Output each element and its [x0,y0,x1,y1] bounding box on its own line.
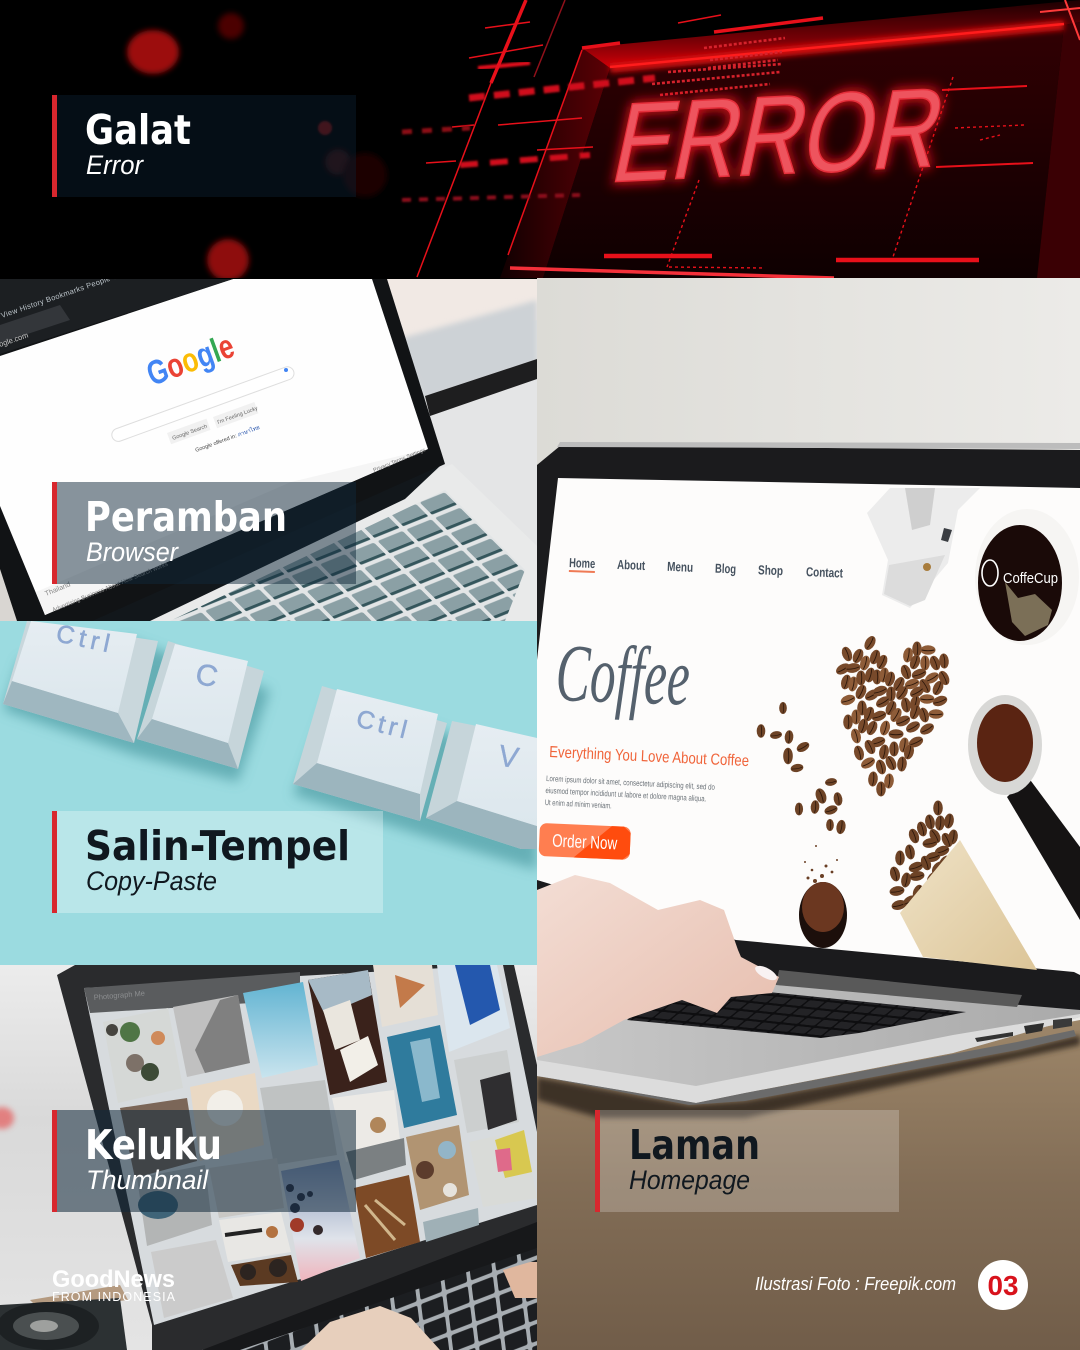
keycap c: C [193,658,221,694]
search box: Google Search [172,424,208,442]
label: peramban [52,482,356,584]
label: galat [52,95,356,197]
key shadows [3,640,537,870]
keycap v [426,721,537,849]
photo credit: Ilustrasi Foto : Freepik.com [755,1274,956,1294]
page number badge [978,1260,1028,1310]
portafilter [968,695,1080,920]
heading: laman: Laman [629,1121,760,1169]
laptop lid [537,446,1080,1015]
scattered beans [757,702,847,835]
translation: copy-paste: Copy-Paste [86,866,217,896]
site navigation: About [617,557,646,573]
paper bag of beans [888,800,1037,970]
data text noise [652,38,785,95]
keycap ctrl 1 [3,619,158,743]
coffee cup: CoffeCup [1003,570,1058,587]
panel: coffee homepage photo [537,278,1080,1350]
heading: keluku: Keluku [85,1121,222,1169]
site navigation: Contact [806,564,844,581]
label: keluku [52,1110,356,1212]
error text: ERROR [603,65,956,207]
lorem paragraph: eiusmod tempor incididunt ut labore et dolore magna aliqua. [545,786,707,803]
label: laman [595,1110,899,1212]
error text [604,78,951,194]
translation: thumbnail: Thumbnail [86,1165,209,1195]
laptop keyboard and hand [202,1222,537,1350]
search box: I'm Feeling Lucky [217,406,259,426]
translation: error: Error [86,150,144,180]
blurred data dashes [402,78,655,200]
hand [537,875,779,1057]
coffee cup [978,525,1062,641]
coffee heading: Coffee [554,627,691,723]
laptop keyboard [92,464,537,625]
lorem paragraph: Ut enim ad minim veniam. [545,798,612,810]
search box: Advertising Business About How Search works [52,562,169,614]
google logo: Google [142,327,239,394]
coffee beans heart [834,634,952,796]
laptop base [537,970,1080,1105]
camera [0,1285,128,1350]
panel: copy paste keys [0,619,537,965]
label: salin-tempel [52,811,383,913]
tile: plants [106,1008,168,1081]
homepage screen [537,478,1080,975]
panel: thumbnail photo [0,965,537,1350]
error screen [402,0,1080,278]
site navigation: Blog [715,561,736,576]
site navigation: Menu [667,559,693,575]
site navigation: Home [569,555,595,571]
heading: galat: Galat [85,106,191,154]
keycap ctrl 2: Ctrl [354,705,414,745]
translation: browser: Browser [86,537,179,567]
lorem paragraph: Lorem ipsum dolor sit amet, consectetur adipiscing elit, sed do [546,774,716,792]
site navigation [568,558,843,578]
lorem paragraph [545,776,715,808]
search box: Privacy Terms Settings [373,447,427,474]
panel: thumbnail photo: Photograph Me [93,989,145,1002]
panel: browser photo [0,269,537,625]
logo: goodnews from indonesia: GoodNews [52,1266,175,1293]
search box: Google offered in: ภาษาไทย [194,424,261,454]
panel: error photo [122,0,1080,278]
logo: goodnews from indonesia: FROM INDONESIA [52,1290,176,1304]
order now button: Order Now [552,831,618,853]
keycap ctrl 1: Ctrl [54,619,117,659]
bokeh red lights [127,13,387,281]
laptop screen: View History Bookmarks People Tab [0,269,126,320]
page number badge: 03 [988,1270,1018,1301]
keycap v: V [496,739,521,775]
error text: ERROR [603,65,956,207]
laptop screen bezel [57,965,537,1350]
wooden table [537,1020,1080,1350]
site navigation: Shop [758,562,783,578]
keycap ctrl 2 [293,686,447,821]
translation: homepage: Homepage [629,1165,750,1195]
search box: Thailand [44,581,72,598]
search box [44,365,427,614]
laptop screen [0,269,445,625]
heading: peramban: Peramban [85,493,287,541]
photo collage [103,965,537,1318]
ground coffee bowl [799,845,847,948]
heading: salin-tempel: Salin-Tempel [85,822,350,870]
moka pot [867,488,980,608]
order now button [539,823,631,860]
keycap c [137,641,264,769]
tagline: Everything You Love About Coffee [549,744,749,770]
